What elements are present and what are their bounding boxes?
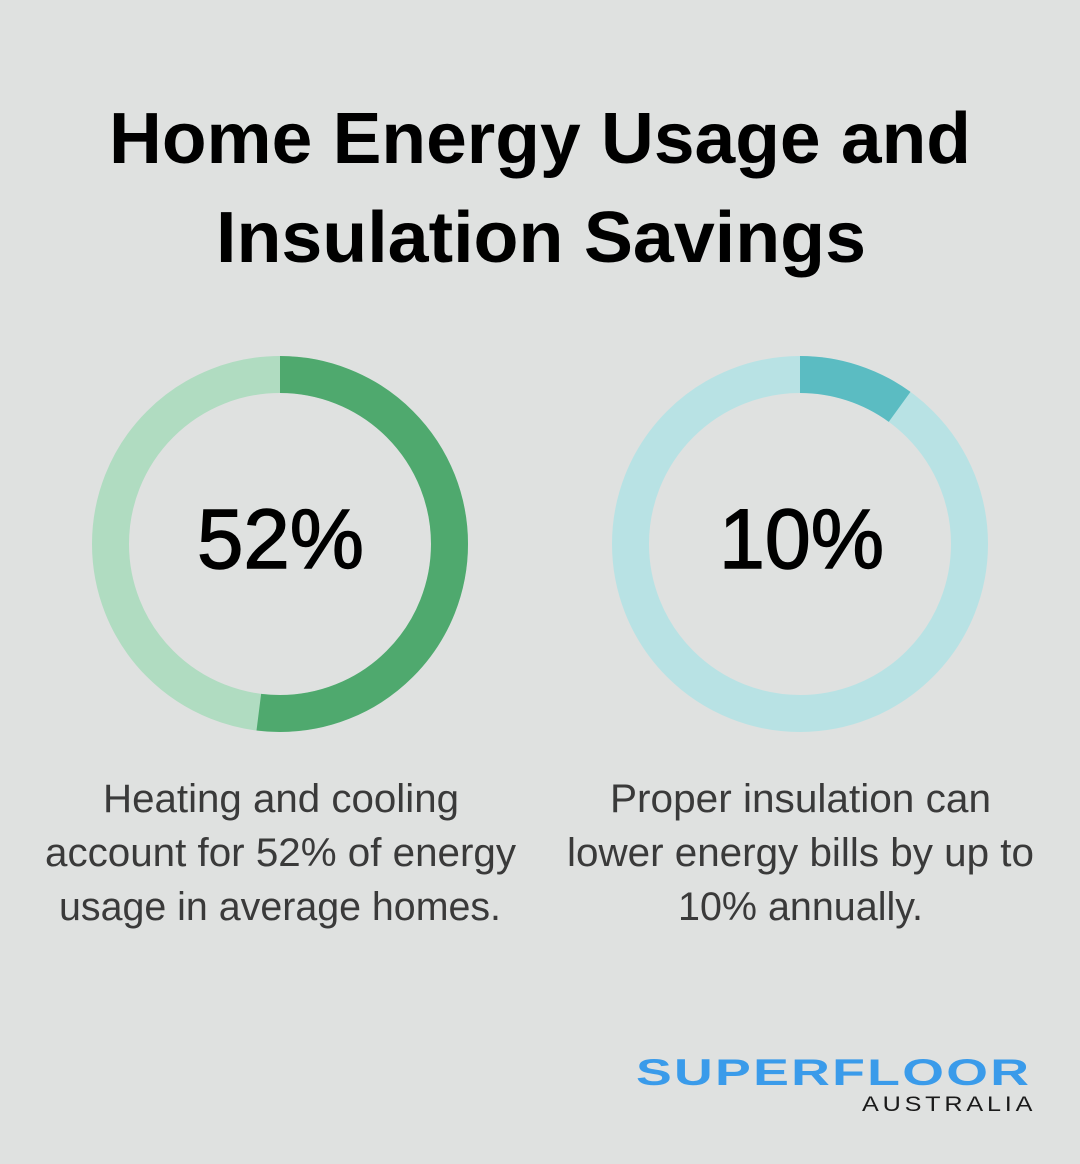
description: insulation savings: Proper insulation can [610,777,991,821]
title: Home Energy Usage and [109,99,971,179]
value: 52%: 52% [197,492,364,586]
description: heating and cooling [45,777,516,929]
description: insulation savings [567,777,1034,929]
panel: insulation savings [567,374,1034,929]
description: heating and cooling: usage in average homes. [59,885,501,929]
description: insulation savings: lower energy bills by up to [567,831,1034,875]
donut chart: 10% [630,374,970,714]
panel: heating and cooling [45,374,516,929]
title: Insulation Savings [216,198,866,278]
donut chart: 52% [110,374,450,714]
logo: AUSTRALIA [862,1092,1033,1116]
logo: SUPERFLOOR [636,1051,1029,1093]
description: heating and cooling: Heating and cooling [103,777,459,821]
value: 10%: 10% [719,492,884,586]
description: heating and cooling: account for 52% of energy [45,831,516,875]
description: insulation savings: 10% annually. [678,885,923,929]
title [109,99,971,278]
logo [636,1051,1033,1116]
